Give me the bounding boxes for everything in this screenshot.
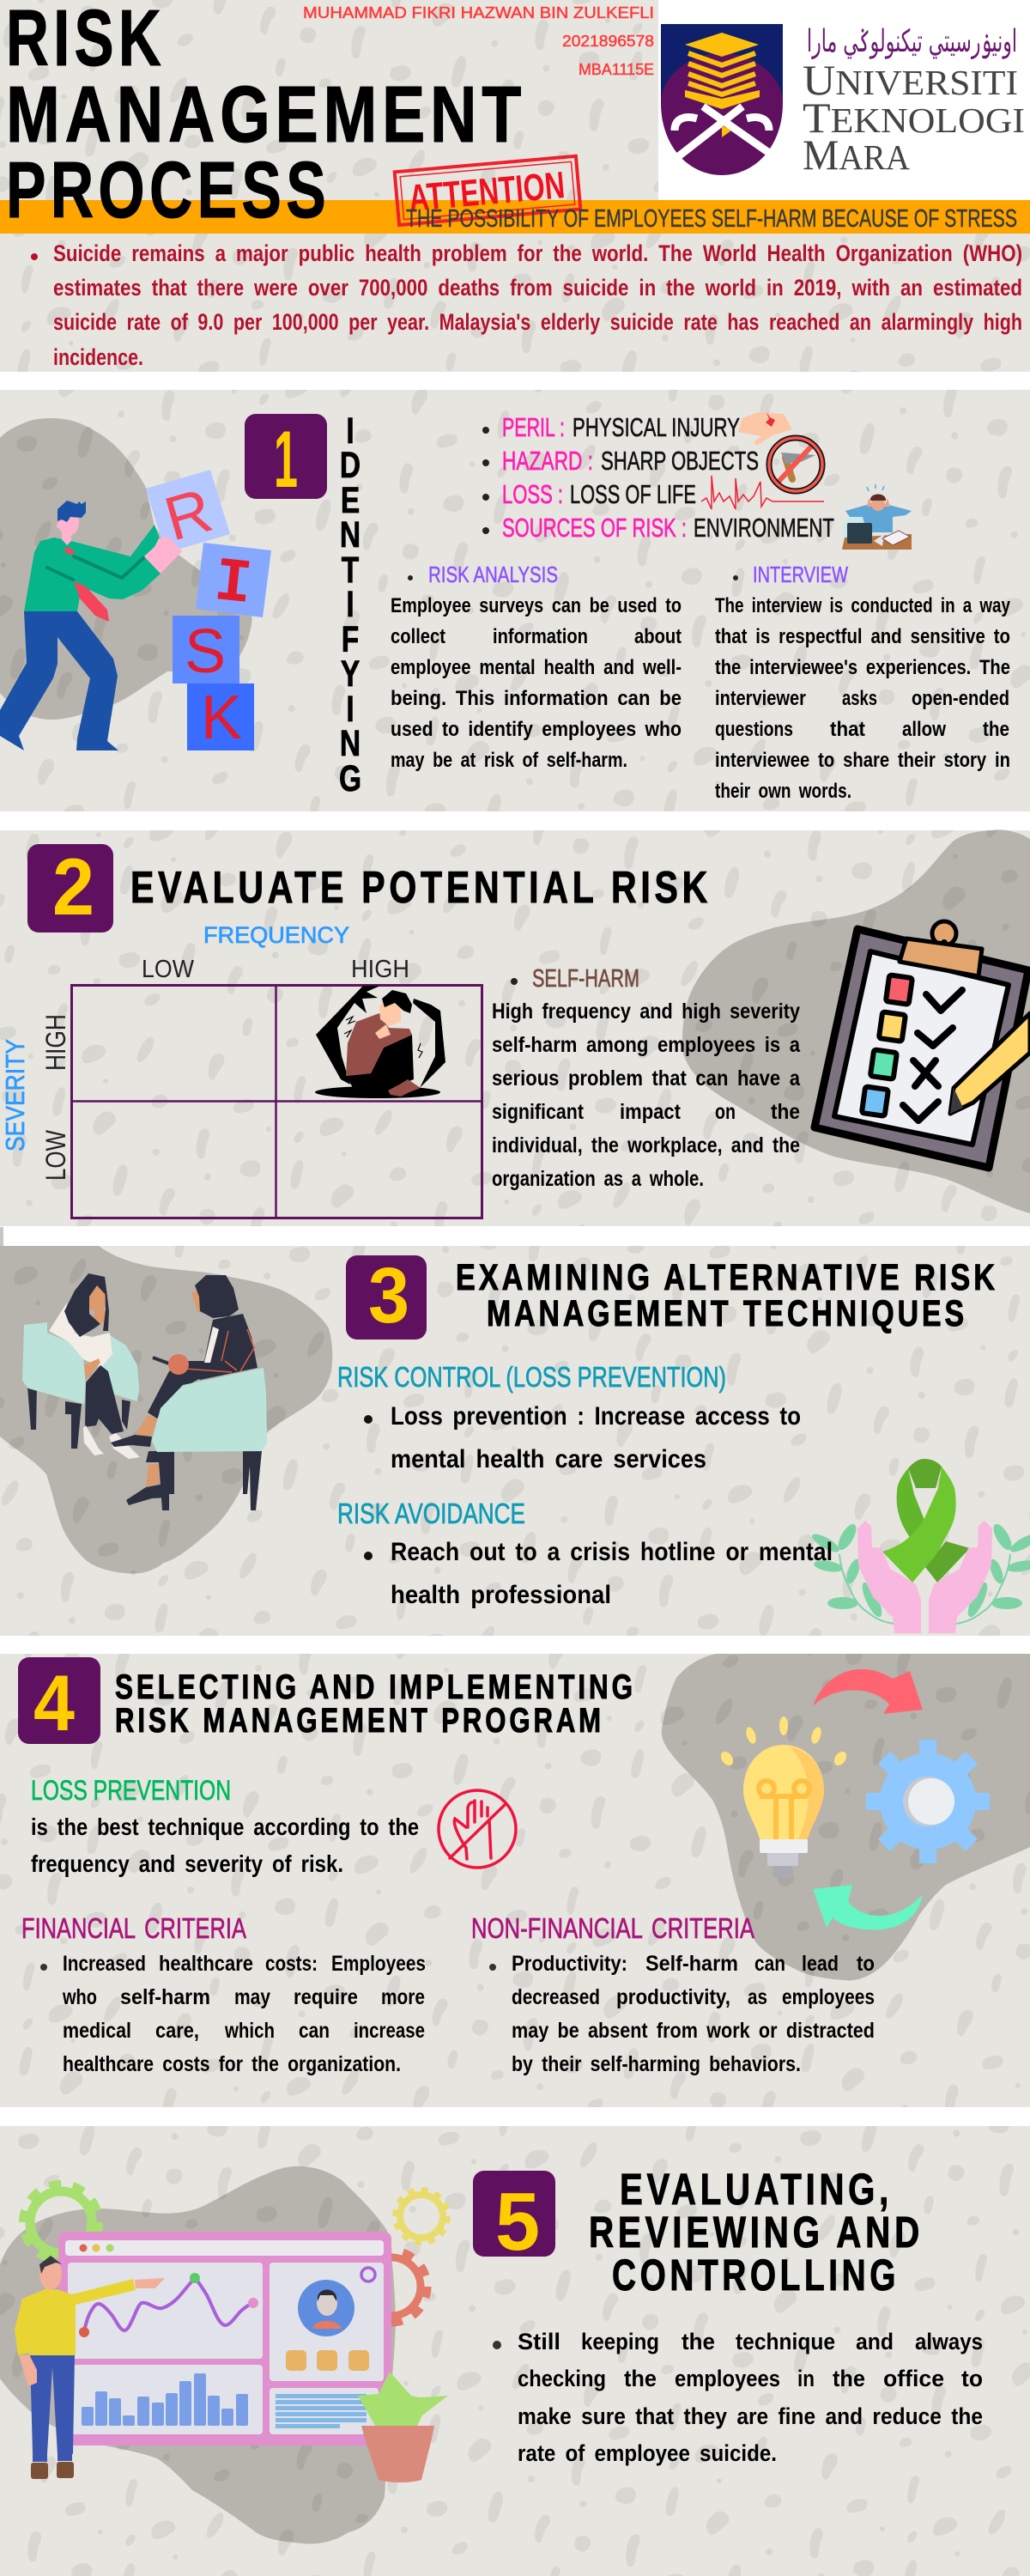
text: keep checking employees: always — [915, 2329, 983, 2354]
text: loss prevention: frequency and severity of risk. — [31, 1850, 343, 1877]
author details — [303, 4, 654, 78]
intro paragraph: incidence. — [53, 344, 143, 370]
text: financial criteria: Increased — [63, 1952, 146, 1976]
text: non-financial criteria: by their self-harming behaviors. — [512, 2052, 801, 2076]
text: keep checking employees: Still — [518, 2329, 560, 2354]
badge: step 3 — [346, 1252, 427, 1340]
text: financial criteria: medical — [63, 2019, 131, 2043]
author details: MBA1115E — [579, 61, 654, 78]
text: risk avoidance: Reach out to a crisis hotline or mental — [391, 1538, 833, 1566]
text: interview: the — [983, 718, 1009, 741]
text: non-financial criteria: Self-harm — [645, 1952, 738, 1976]
text: risk analysis: about — [634, 625, 682, 648]
text: self-harm: individual, the workplace, and the — [492, 1133, 800, 1157]
text: keep checking employees: the — [682, 2329, 715, 2354]
text: loss prevention: LOSS PREVENTION — [31, 1775, 231, 1806]
text: self-harm: self-harm among employees is a — [492, 1033, 801, 1057]
text: risk analysis: Employee surveys can be used to — [391, 594, 682, 617]
text: interview — [715, 594, 1011, 803]
panel: header — [0, 0, 1030, 372]
text: self-harm: the — [771, 1100, 800, 1124]
heading: interview — [733, 562, 848, 587]
text: non-financial criteria: as — [748, 1985, 767, 2009]
text: keep checking employees: checking — [518, 2366, 606, 2391]
stamp: attention: ATTENTION — [407, 164, 566, 220]
illustration: counselling conversation — [22, 1273, 267, 1510]
text: keep checking employees: the — [624, 2366, 657, 2391]
text: financial criteria: healthcare — [159, 1952, 253, 1976]
illustration: man stacking risk blocks: K — [201, 683, 242, 752]
illustration: man stacking risk blocks: R — [158, 476, 220, 555]
list: risk terms: LOSS OF LIFE — [570, 479, 696, 509]
text: self-harm: organization as a whole. — [492, 1167, 704, 1191]
illustration: green ribbon and hands — [809, 1459, 1030, 1633]
text: keep checking employees — [493, 2329, 983, 2466]
text: non-financial criteria: lead — [802, 1952, 839, 1976]
badge: step 2: 2 — [52, 841, 94, 932]
matrix: frequency and severity: HIGH — [351, 956, 409, 983]
heading: selecting and implementing — [115, 1668, 636, 1740]
intro paragraph — [31, 240, 1022, 370]
illustration: distressed figure — [315, 986, 445, 1098]
heading: interview: INTERVIEW — [753, 562, 848, 587]
matrix: frequency and severity: FREQUENCY — [203, 922, 349, 948]
text: non-financial criteria: decreased — [512, 1985, 600, 2009]
text: interview: questions — [715, 718, 793, 741]
vertical heading: identifying: D — [340, 445, 360, 486]
title: MANAGEMENT — [6, 70, 526, 159]
text: non-financial criteria: may be absent from work or distracted — [512, 2019, 875, 2043]
author details: 2021896578 — [562, 33, 654, 50]
vertical heading: identifying: T — [342, 550, 360, 591]
icon: stressed worker — [842, 484, 912, 550]
list: risk terms — [482, 412, 834, 543]
logo: UiTM — [658, 0, 1030, 200]
text: self-harm: significant — [492, 1100, 585, 1124]
text: non-financial criteria: productivity, — [616, 1985, 730, 2009]
text: interview: open-ended — [912, 687, 1009, 710]
matrix: frequency and severity — [0, 922, 482, 1218]
banner strip — [0, 200, 1030, 234]
text: risk avoidance: health professional — [391, 1581, 611, 1609]
panel: step 1 identifying risk — [0, 390, 1030, 811]
heading: self-harm: SELF-HARM — [532, 965, 639, 993]
text: risk control: mental health care services — [391, 1445, 706, 1473]
vertical heading: identifying: Y — [341, 653, 360, 695]
title — [6, 0, 526, 234]
text: non-financial criteria: to — [857, 1952, 875, 1976]
badge: step 1: 1 — [274, 414, 298, 504]
text: risk analysis: may be at risk of self-harm. — [391, 749, 627, 772]
matrix: frequency and severity: LOW — [40, 1129, 71, 1181]
badge: step 3: 3 — [368, 1252, 409, 1340]
text: financial criteria: self-harm — [120, 1985, 210, 2009]
vertical heading: identifying: E — [341, 480, 360, 521]
heading: selecting and implementing: SELECTING AND IMPLEMENTING — [115, 1668, 636, 1706]
text: risk control: RISK CONTROL (LOSS PREVENTION) — [337, 1361, 726, 1393]
text: risk analysis: information — [493, 625, 588, 648]
text: risk analysis: collect — [391, 625, 445, 648]
illustration: dashboard with presenter — [15, 2184, 448, 2482]
vertical heading: identifying: I — [346, 584, 354, 625]
text: financial criteria: can — [299, 2019, 330, 2043]
vertical heading: identifying: N — [340, 514, 360, 556]
vertical heading: identifying — [339, 410, 361, 799]
text: interview: allow — [902, 718, 946, 741]
panel: step 5 evaluating reviewing controlling — [0, 2126, 1030, 2576]
panel: step 2 evaluate potential risk — [0, 829, 1030, 1226]
vertical heading: identifying: I — [346, 689, 354, 730]
matrix: frequency and severity: LOW — [142, 956, 195, 983]
text: keep checking employees: office — [883, 2366, 944, 2391]
heading: evaluate potential risk: EVALUATE POTENTIAL RISK — [130, 863, 712, 913]
panel: step 4 selecting and implementing — [0, 1654, 1030, 2107]
heading: self-harm — [511, 965, 639, 993]
text: non-financial criteria: Productivity: — [512, 1952, 627, 1976]
vertical heading: identifying: I — [346, 410, 354, 452]
illustration: man stacking risk blocks — [0, 470, 271, 752]
list: risk terms: PERIL : — [502, 412, 565, 442]
text: non-financial criteria: can — [754, 1952, 785, 1976]
text: keep checking employees: the — [833, 2366, 865, 2391]
text: keep checking employees: make sure that they are fine and reduce the — [518, 2403, 983, 2429]
text: non-financial criteria: NON-FINANCIAL CRITERIA — [471, 1912, 754, 1944]
logo: UiTM: TEKNOLOGI — [803, 94, 1025, 142]
text: interview: interviewer — [715, 687, 806, 710]
text: financial criteria: which — [224, 2019, 275, 2043]
heading: evaluating reviewing controlling: REVIEWING AND — [589, 2208, 924, 2257]
text: self-harm: serious problem that can have a — [492, 1066, 801, 1091]
text: keep checking employees: technique — [736, 2329, 835, 2354]
heading: evaluating reviewing controlling: EVALUATING, — [620, 2165, 893, 2214]
heading: risk analysis: RISK ANALYSIS — [428, 562, 558, 587]
logo: UiTM: MARA — [803, 131, 910, 179]
text: financial criteria: care, — [155, 2019, 199, 2043]
text: keep checking employees: keeping — [581, 2329, 659, 2354]
illustration: idea gear cycle — [718, 1669, 990, 1929]
text: self-harm: on — [715, 1100, 736, 1124]
text: loss prevention — [31, 1775, 419, 1877]
text: self-harm: impact — [620, 1100, 682, 1124]
corner sliver — [0, 1227, 3, 1246]
logo: UiTM: UNIVERSITI — [803, 56, 1018, 104]
text: interview: asks — [842, 687, 877, 710]
text: financial criteria: require — [294, 1985, 358, 2009]
list: risk terms: SHARP OBJECTS — [601, 446, 759, 476]
matrix: frequency and severity: HIGH — [40, 1014, 71, 1071]
icon: heartbeat line — [701, 476, 824, 509]
text: risk analysis: being. This information can be — [391, 687, 682, 710]
text: financial criteria: FINANCIAL CRITERIA — [21, 1912, 246, 1944]
text: financial criteria: who — [62, 1985, 97, 2009]
heading: evaluating reviewing controlling: CONTROLLING — [612, 2251, 900, 2300]
text: loss prevention: is the best technique according to the — [31, 1814, 419, 1840]
icon: stop hand — [439, 1790, 516, 1868]
text: financial criteria — [21, 1912, 426, 2076]
badge: step 4 — [18, 1657, 100, 1747]
text: keep checking employees: to — [961, 2366, 983, 2391]
text: financial criteria: increase — [354, 2019, 425, 2043]
list: risk terms: ENVIRONMENT — [694, 513, 834, 543]
panel: step 3 alternative techniques — [0, 1246, 1030, 1636]
text: self-harm: High frequency and high severity — [492, 999, 800, 1024]
text: non-financial criteria — [471, 1912, 875, 2076]
badge: step 1 — [245, 414, 327, 504]
vertical heading: identifying: N — [340, 723, 360, 764]
text: non-financial criteria: employees — [782, 1985, 875, 2009]
text: risk analysis: used to identify employees who — [391, 718, 682, 741]
text: risk analysis — [391, 594, 682, 772]
heading: evaluating reviewing controlling — [589, 2165, 924, 2300]
text: keep checking employees: in — [797, 2366, 815, 2391]
text: keep checking employees: rate of employee suicide. — [518, 2440, 777, 2466]
text: risk analysis: employee mental health and well- — [391, 656, 682, 679]
badge: step 5: 5 — [495, 2176, 540, 2268]
list: risk terms: LOSS : — [502, 479, 563, 509]
heading: selecting and implementing: RISK MANAGEMENT PROGRAM — [115, 1702, 604, 1740]
badge: step 4: 4 — [33, 1660, 75, 1747]
text: interview: their own words. — [715, 780, 851, 803]
list: risk terms: HAZARD : — [502, 446, 593, 476]
icon: no sharp objects — [769, 438, 822, 491]
heading: examining alternative techniques — [456, 1257, 998, 1334]
text: risk control — [337, 1361, 801, 1473]
author details: MUHAMMAD FIKRI HAZWAN BIN ZULKEFLI — [303, 4, 654, 21]
text: risk avoidance: RISK AVOIDANCE — [337, 1498, 525, 1529]
text: financial criteria: more — [381, 1985, 425, 2009]
vertical heading: identifying: F — [342, 619, 359, 660]
text: financial criteria: Employees — [331, 1952, 426, 1976]
list: risk terms: PHYSICAL INJURY — [573, 412, 740, 442]
text: interview: that — [830, 718, 865, 741]
text: risk control: Loss prevention : Increase access to — [391, 1402, 801, 1431]
icon: injured hand — [738, 412, 792, 446]
list: risk terms: SOURCES OF RISK : — [502, 513, 687, 543]
text: financial criteria: healthcare costs for the organization. — [63, 2052, 401, 2076]
illustration: man stacking risk blocks: S — [185, 617, 226, 686]
text: keep checking employees: and — [856, 2329, 894, 2354]
text: self-harm — [492, 999, 801, 1191]
illustration: clipboard checklist — [815, 921, 1030, 1168]
matrix: frequency and severity: SEVERITY — [0, 1039, 30, 1151]
heading: risk analysis — [408, 562, 558, 587]
badge: step 5 — [473, 2171, 555, 2268]
vertical heading: identifying: G — [339, 758, 361, 799]
text: financial criteria: costs: — [265, 1952, 318, 1976]
text: financial criteria: may — [234, 1985, 270, 2009]
badge: step 2 — [27, 841, 113, 933]
illustration: man stacking risk blocks: I — [211, 547, 255, 621]
text: risk avoidance — [337, 1498, 833, 1609]
title: PROCESS — [6, 145, 330, 234]
stamp: attention — [395, 156, 580, 225]
text: keep checking employees: employees — [675, 2366, 780, 2391]
